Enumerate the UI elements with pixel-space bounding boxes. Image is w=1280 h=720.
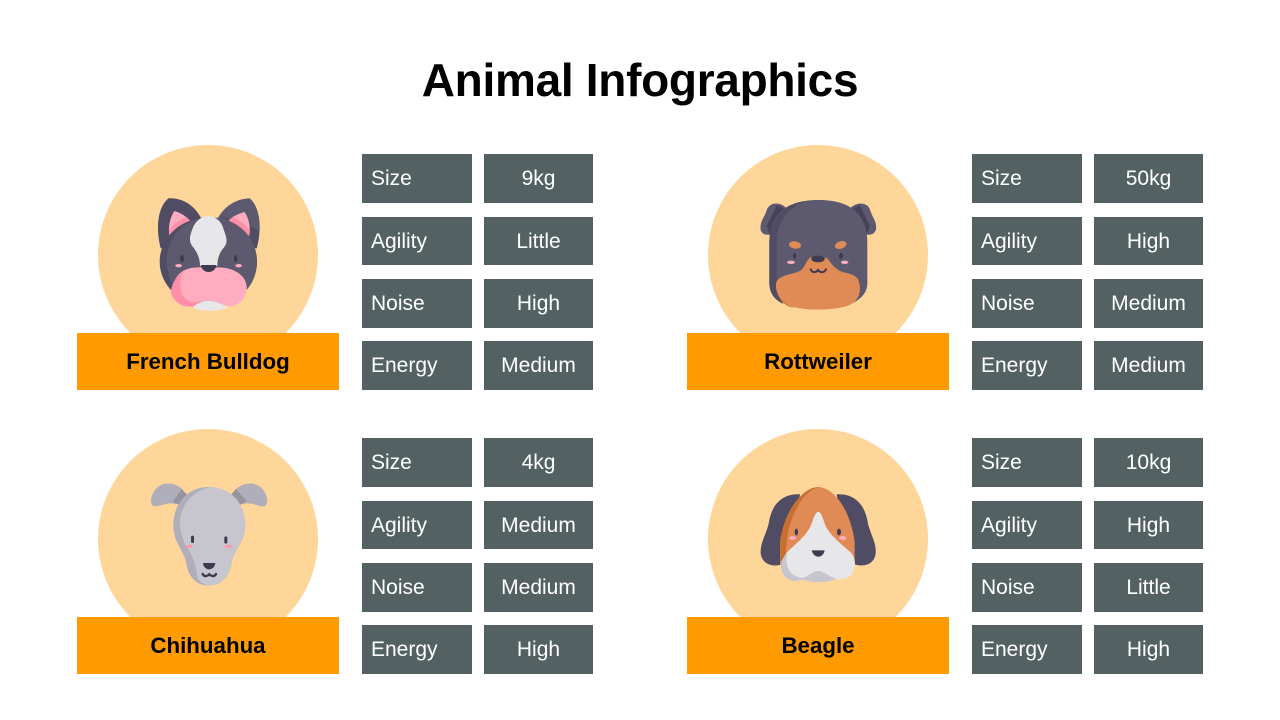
panel: French Bulldog: Little (516, 230, 561, 253)
panel: Beagle (687, 429, 1203, 674)
icon: Chihuahua in circle (98, 429, 318, 617)
panel: Beagle: 10kg (1126, 451, 1171, 474)
panel: French Bulldog: Noise (371, 292, 425, 315)
panel: Rottweiler: High (1127, 230, 1170, 253)
panel: Beagle: High (1127, 514, 1170, 537)
panel: Rottweiler (687, 145, 1203, 390)
name banner: Beagle (781, 633, 855, 658)
panel: Chihuahua (77, 429, 593, 674)
panel: Beagle: Little (1126, 576, 1171, 599)
icon: French Bulldog in circle (98, 145, 318, 333)
name banner (687, 333, 949, 390)
stats table (362, 438, 593, 674)
panel: Beagle: High (1127, 638, 1170, 661)
name banner: Rottweiler (764, 349, 872, 374)
panel: Chihuahua: High (517, 638, 560, 661)
panel: Rottweiler: 50kg (1126, 167, 1171, 190)
panel: French Bulldog: Agility (371, 230, 427, 253)
name banner: French Bulldog (126, 349, 290, 374)
name banner (687, 617, 949, 674)
name banner: Chihuahua (150, 633, 266, 658)
panel: French Bulldog: Energy (371, 354, 438, 377)
icon: Beagle in circle (708, 429, 928, 617)
panel: Beagle: Agility (981, 514, 1037, 537)
panel: Beagle: Noise (981, 576, 1035, 599)
name banner (77, 617, 339, 674)
panel: French Bulldog: Medium (501, 354, 576, 377)
panel: Chihuahua: Noise (371, 576, 425, 599)
panel: Chihuahua: Medium (501, 576, 576, 599)
icon: Rottweiler in circle (708, 145, 928, 333)
panel: Rottweiler: Noise (981, 292, 1035, 315)
panel: Beagle: Size (981, 451, 1022, 474)
panel: Chihuahua: Medium (501, 514, 576, 537)
panel: Chihuahua: Size (371, 451, 412, 474)
panel: Chihuahua: 4kg (522, 451, 555, 474)
panel: Chihuahua: Energy (371, 638, 438, 661)
panel: Rottweiler: Medium (1111, 354, 1186, 377)
panel: French Bulldog: 9kg (522, 167, 555, 190)
panel: Beagle: Energy (981, 638, 1048, 661)
panel: Rottweiler: Agility (981, 230, 1037, 253)
panel: Chihuahua: Agility (371, 514, 427, 537)
panel: French Bulldog: Size (371, 167, 412, 190)
panel: Rottweiler: Size (981, 167, 1022, 190)
stats table (972, 438, 1203, 674)
panel: French Bulldog: High (517, 292, 560, 315)
title: Animal Infographics (422, 54, 858, 106)
panel: Rottweiler: Energy (981, 354, 1048, 377)
white blaze (190, 216, 227, 266)
stats table (362, 154, 593, 390)
panel: French Bulldog (77, 145, 593, 390)
name banner (77, 333, 339, 390)
stats table (972, 154, 1203, 390)
panel: Rottweiler: Medium (1111, 292, 1186, 315)
